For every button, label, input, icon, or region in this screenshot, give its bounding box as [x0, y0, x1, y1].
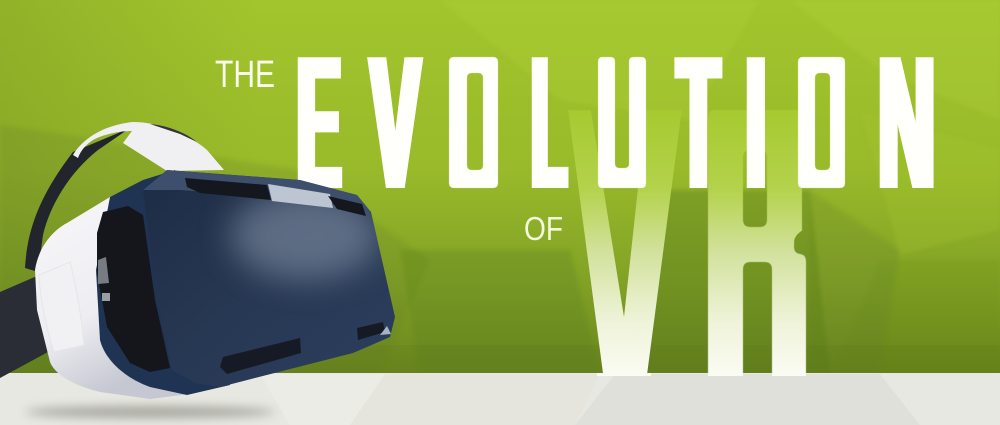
white body shell [35, 178, 190, 399]
title word: EVOLUTION: N [878, 17, 935, 229]
top arch strap [25, 128, 130, 272]
touchpad outline [39, 262, 84, 352]
title word: EVOLUTION [297, 15, 935, 229]
top white band [73, 122, 224, 171]
floor [0, 373, 1000, 425]
title word: EVOLUTION: V [371, 15, 420, 229]
bottom right slot [357, 322, 385, 340]
dark side recess [97, 206, 170, 372]
title word: EVOLUTION: O [800, 26, 845, 225]
navy front visor [143, 170, 395, 387]
visor highlight [143, 170, 380, 280]
icon: VR headset [0, 122, 395, 399]
top light strip [268, 184, 333, 208]
title word: EVOLUTION: T [678, 18, 719, 229]
headset shadow [25, 406, 275, 418]
side buttons [98, 257, 109, 284]
large gradient word: VR [568, 110, 806, 373]
top right slot [328, 196, 366, 216]
rear strap [0, 276, 48, 378]
title word: OF: OF [524, 210, 563, 247]
title word: THE: THE [215, 54, 275, 96]
title word: EVOLUTION: E [297, 17, 341, 229]
bottom long slot [220, 338, 301, 374]
top left slot [185, 178, 271, 200]
title word: EVOLUTION: I [746, 17, 766, 229]
navy side rim [96, 170, 230, 395]
title word: EVOLUTION: O [451, 27, 498, 225]
logo mark [380, 326, 391, 335]
title word: EVOLUTION: U [597, 22, 647, 222]
title word: EVOLUTION: L [532, 16, 566, 229]
